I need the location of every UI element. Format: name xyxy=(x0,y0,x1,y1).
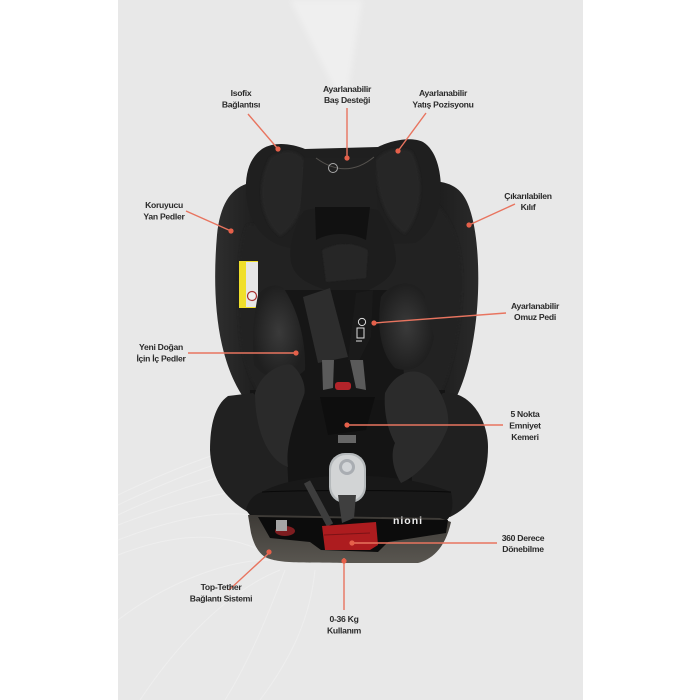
car seat xyxy=(210,139,488,563)
label: recline: Yatış Pozisyonu xyxy=(412,99,474,109)
harness strap right xyxy=(348,290,373,363)
base xyxy=(248,515,451,563)
label: recline: Ayarlanabilir xyxy=(419,88,467,98)
strap loop xyxy=(307,482,330,525)
seat back shell xyxy=(215,182,478,400)
buckle xyxy=(320,382,375,443)
callout dots xyxy=(228,146,472,564)
label: cover: Kılıf xyxy=(521,202,536,212)
label: rotation: 360 Derece xyxy=(502,533,544,543)
label: shoulder pad: Ayarlanabilir xyxy=(511,301,559,311)
label: side pads: Koruyucu xyxy=(145,200,183,210)
seat cushion xyxy=(246,476,452,524)
label: harness: Emniyet xyxy=(509,420,541,430)
leg pad left xyxy=(255,364,305,467)
strap logo xyxy=(356,318,366,341)
callout lines xyxy=(186,108,515,610)
background panel xyxy=(118,0,583,700)
harness strap left xyxy=(303,288,348,363)
brand: nioni xyxy=(393,515,423,527)
upper head pad xyxy=(290,207,396,292)
label: shoulder pad: Omuz Pedi xyxy=(514,312,556,322)
filler behind seat xyxy=(250,390,445,505)
label: weight: 0-36 Kg xyxy=(329,614,359,624)
warning label xyxy=(239,261,258,308)
side bolster left xyxy=(210,393,290,515)
label: Isofix: Bağlantısı xyxy=(222,99,260,109)
label: harness: Kemeri xyxy=(511,432,539,442)
webbing xyxy=(322,360,366,390)
label: rotation: Dönebilme xyxy=(502,544,544,554)
headrest xyxy=(246,139,441,248)
buckle release xyxy=(329,453,366,523)
label: head support: Ayarlanabilir xyxy=(323,84,371,94)
label: cover: Çıkarılabilen xyxy=(504,191,552,201)
label: Isofix: Isofix xyxy=(231,88,251,98)
shoulder pad left xyxy=(253,286,305,379)
label: harness: 5 Nokta xyxy=(510,409,540,419)
label: top tether: Top-Tether xyxy=(201,582,241,592)
label: newborn pads: İçin İç Pedler xyxy=(136,353,186,363)
side bolster right xyxy=(410,393,488,517)
leg pad right xyxy=(385,371,448,483)
red lever xyxy=(322,522,378,550)
label: weight: Kullanım xyxy=(327,625,362,635)
label: side pads: Yan Pedler xyxy=(143,211,186,221)
inner seat xyxy=(285,290,405,400)
label: head support: Baş Desteği xyxy=(324,95,370,105)
label: top tether: Bağlantı Sistemi xyxy=(190,593,252,603)
shoulder pad right xyxy=(379,283,434,370)
isofix clip xyxy=(275,520,295,536)
head logo xyxy=(316,157,374,169)
label: newborn pads: Yeni Doğan xyxy=(139,342,183,352)
